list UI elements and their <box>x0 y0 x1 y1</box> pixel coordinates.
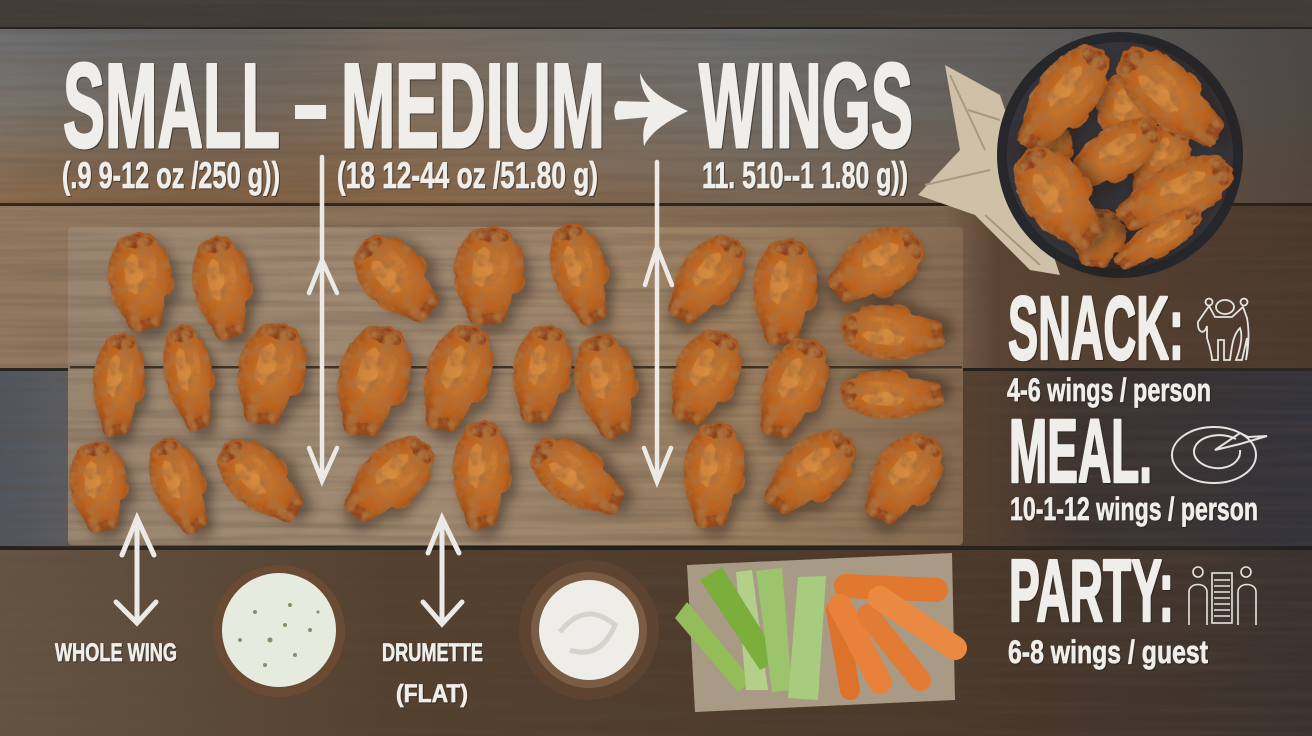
icon: snack people <box>1198 298 1249 360</box>
subtitle: wings size: 11. 510--1 1.80 g)) <box>702 155 908 196</box>
title line <box>63 39 913 173</box>
icon: plate and cutlery <box>1172 427 1267 483</box>
title: medium: MEDIUM <box>341 39 605 173</box>
white dip bowl <box>519 560 659 700</box>
title arrow <box>614 73 688 146</box>
wings: bottom row <box>67 415 966 548</box>
wings: middle row <box>88 293 955 459</box>
label: drumette: DRUMETTE <box>382 639 483 667</box>
label: whole wing: WHOLE WING <box>55 639 177 667</box>
bowl of wings <box>996 24 1251 287</box>
icon: party people and list <box>1189 567 1256 625</box>
vegetable tray <box>675 553 955 712</box>
party text: 6-8 wings / guest <box>1008 634 1208 670</box>
arrow: drumette <box>423 518 462 624</box>
arrow: right vertical <box>644 162 672 482</box>
meal heading: MEAL. <box>1009 402 1152 502</box>
cutting board <box>68 227 963 545</box>
arrow: left vertical <box>309 157 337 481</box>
carrots <box>836 586 955 690</box>
title: wings: WINGS <box>699 39 913 173</box>
subtitle: medium size: (18 12-44 oz /51.80 g) <box>337 155 598 196</box>
snack text: 4-6 wings / person <box>1007 372 1211 408</box>
ranch dip bowl <box>213 565 345 697</box>
arrow: whole wing <box>116 518 156 623</box>
napkin <box>918 65 1060 275</box>
label: flat: (FLAT) <box>396 680 468 708</box>
title: dash <box>295 105 326 119</box>
subtitle: small size: (.9 9-12 oz /250 g)) <box>62 155 280 196</box>
title: small: SMALL <box>63 39 280 173</box>
wings: top row <box>105 212 941 357</box>
celery <box>675 567 826 700</box>
